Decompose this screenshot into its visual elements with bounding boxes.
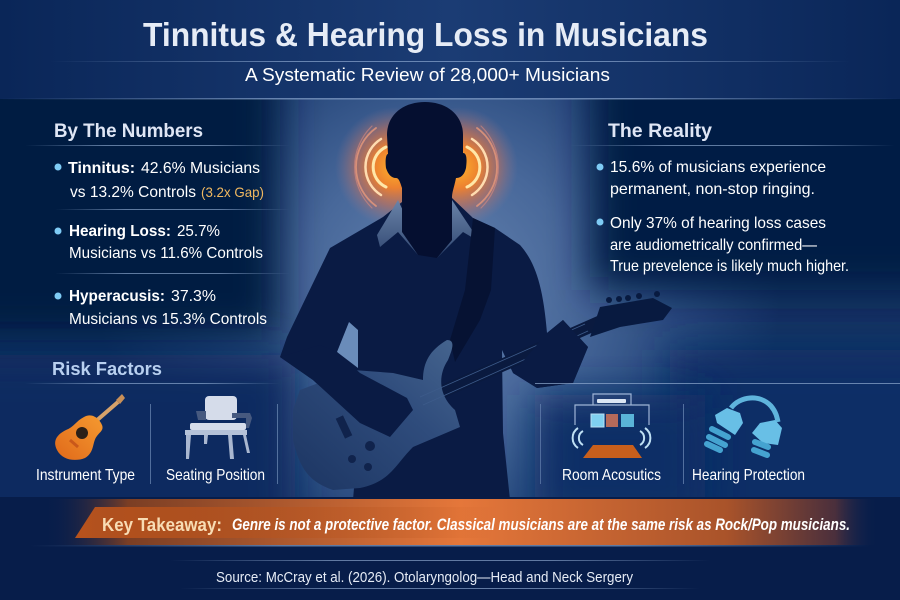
tuning pegs	[606, 291, 660, 303]
icon: ringing ears glow	[335, 107, 518, 227]
label: instrument type: Instrument Type	[36, 467, 135, 484]
label: room acoustics: Room Acosutics	[562, 467, 661, 484]
stat: hearing loss: 25.7%	[177, 223, 220, 240]
fact: audiometric confirmation	[596, 215, 849, 275]
stat: hyperacusis: Musicians vs 15.3% Controls	[69, 311, 267, 328]
silhouette torso	[280, 198, 588, 500]
arm gap	[337, 322, 358, 368]
shirt collar	[377, 200, 480, 258]
stat: hyperacusis: 37.3%	[171, 288, 216, 305]
fretting hand	[513, 320, 588, 388]
stat: tinnitus: (3.2x Gap)	[201, 184, 264, 200]
icon: acoustic guitar	[55, 394, 125, 460]
guitar body	[293, 340, 460, 490]
stat: hyperacusis	[54, 288, 267, 328]
stat: tinnitus: vs 13.2% Controls	[70, 184, 196, 201]
illustration: guitarist silhouette	[280, 102, 672, 500]
stat: hearing loss: Musicians vs 11.6% Controls	[69, 245, 263, 262]
panel: by the numbers	[25, 120, 290, 328]
banner: key takeaway	[45, 499, 877, 545]
guitar neck	[412, 322, 600, 405]
head	[386, 102, 467, 258]
fact: audiometric confirmation: are audiometrically confirmed—	[610, 237, 817, 254]
panel: the reality	[570, 120, 895, 275]
title: Tinnitus & Hearing Loss in Musicians	[143, 16, 708, 53]
heading: the reality: The Reality	[608, 120, 712, 142]
panel: risk factors right	[535, 383, 900, 484]
source: Source: McCray et al. (2026). Otolaryngolog—Head and Neck Sergery	[216, 569, 633, 586]
heading: risk factors: Risk Factors	[52, 358, 162, 379]
heading: by the numbers: By The Numbers	[54, 120, 203, 142]
stat: hyperacusis: Hyperacusis:	[69, 288, 165, 305]
stat: hearing loss: Hearing Loss:	[69, 223, 171, 240]
panel: risk factors left	[25, 358, 280, 484]
strumming arm	[280, 345, 413, 437]
fact: permanent ringing	[596, 159, 826, 198]
stat: hearing loss	[54, 223, 263, 262]
subtitle: A Systematic Review of 28,000+ Musicians	[245, 65, 610, 85]
label: key takeaway: Key Takeaway:	[102, 515, 222, 535]
fact: audiometric confirmation: True prevelence is likely much higher.	[610, 258, 849, 275]
fact: audiometric confirmation: Only 37% of hearing loss cases	[610, 215, 826, 232]
stat: tinnitus: 42.6% Musicians	[141, 160, 260, 177]
icon: hearing protection	[707, 398, 782, 455]
label: hearing protection: Hearing Protection	[692, 467, 805, 484]
guitar strap	[450, 218, 495, 362]
stat: tinnitus: Tinnitus:	[68, 160, 135, 177]
label: seating position: Seating Position	[166, 467, 265, 484]
stat: tinnitus	[54, 160, 264, 201]
icon: room acoustics	[573, 394, 650, 458]
fact: permanent ringing: permanent, non-stop ringing.	[610, 181, 815, 198]
guitar knobs and pickups	[336, 415, 375, 471]
headstock	[590, 298, 672, 337]
icon: chair	[185, 396, 252, 459]
fact: permanent ringing: 15.6% of musicians experience	[610, 159, 826, 176]
